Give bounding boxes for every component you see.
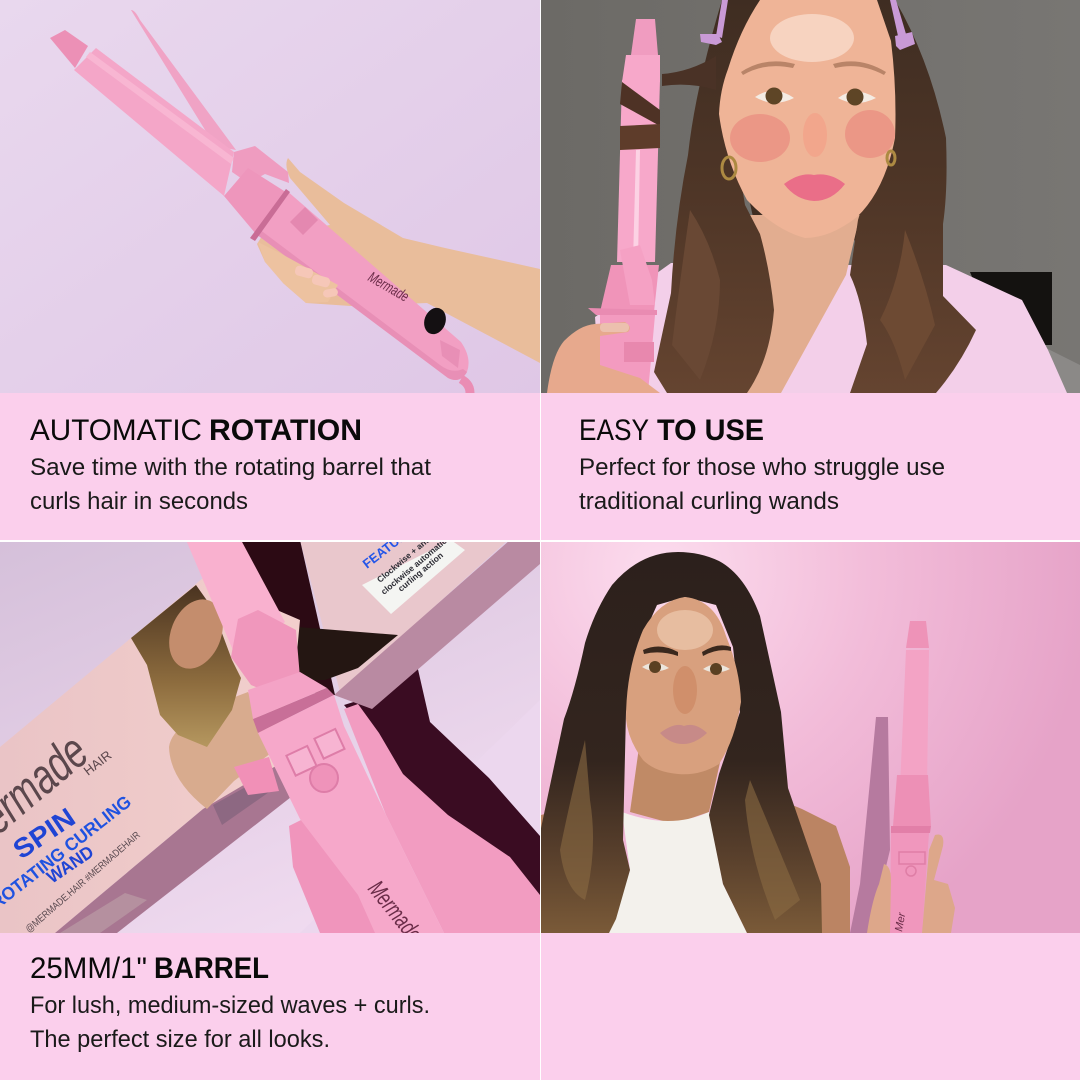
text block: easy to use: traditional curling wands — [579, 488, 839, 515]
text block: easy to use: EASY — [579, 414, 649, 447]
rear box: FEATURES — [360, 517, 424, 571]
shadow behind glove — [344, 665, 540, 900]
text block: automatic rotation: ROTATION — [209, 414, 362, 447]
text block: automatic rotation — [0, 393, 540, 540]
face — [719, 0, 896, 238]
rear box: Clockwise + anti- — [375, 532, 434, 585]
text block: easy to use: TO USE — [657, 414, 764, 447]
panel: automatic rotation — [0, 0, 540, 540]
photo: wand with packaging box — [0, 517, 540, 947]
curling wand — [588, 19, 660, 393]
panel: model holding wand — [540, 542, 1080, 1080]
face — [626, 597, 741, 774]
box branding text: WAND — [43, 842, 97, 887]
hair clips — [700, 0, 915, 50]
panel: easy to use — [541, 0, 1080, 540]
front box — [0, 578, 300, 933]
text block: 25mm barrel: BARREL — [154, 952, 269, 985]
hand and forearm — [257, 158, 540, 363]
text block: automatic rotation: AUTOMATIC — [30, 414, 202, 447]
text block: 25mm barrel: The perfect size for all looks. — [30, 1026, 330, 1053]
rear box: clockwise automatic — [379, 536, 449, 597]
text block: easy to use: Perfect for those who struggle use — [579, 454, 945, 481]
white top — [609, 812, 747, 933]
neck — [630, 753, 720, 821]
rear box: curling action — [396, 550, 445, 594]
text block: automatic rotation: curls hair in seconds — [30, 488, 248, 515]
curling wand: Mermade — [362, 876, 427, 947]
box branding text: HAIR — [81, 747, 114, 778]
text block: easy to use — [541, 393, 1080, 540]
shoulders — [794, 806, 850, 933]
photo: woman with wavy hair holding wand — [540, 542, 1080, 933]
shirt — [595, 263, 1067, 393]
panel: 25mm barrel — [0, 517, 540, 1080]
hand — [547, 322, 660, 393]
rear box — [242, 542, 540, 709]
curling wand — [50, 10, 470, 393]
hair — [654, 0, 976, 393]
box branding text: @MERMADE.HAIR #MERMADEHAIR — [24, 830, 143, 935]
text block: 25mm barrel — [0, 933, 540, 1080]
curling wand — [890, 621, 931, 933]
curling wand — [186, 540, 444, 947]
box model photo — [131, 585, 275, 809]
text block: 25mm barrel: For lush, medium-sized waves + curls. — [30, 992, 430, 1019]
photo: woman curling hair — [541, 0, 1080, 393]
hair — [540, 552, 822, 933]
earrings — [722, 151, 895, 179]
hand — [867, 834, 955, 933]
box branding text: SPIN — [8, 802, 81, 865]
curling wand: Mer — [893, 910, 908, 933]
blank text panel — [541, 933, 1080, 1080]
neck and chest — [735, 215, 860, 393]
fingers — [264, 256, 338, 303]
box branding text — [0, 741, 140, 932]
hair behind neck — [750, 203, 860, 240]
wand shadow — [850, 717, 890, 933]
glove — [234, 704, 540, 933]
text block: 25mm barrel: 25MM/1" — [30, 952, 147, 985]
photo: wand held in hand — [0, 0, 540, 393]
text block: automatic rotation: Save time with the rotating barrel that — [30, 454, 431, 481]
curling wand: Mermade — [365, 269, 412, 305]
